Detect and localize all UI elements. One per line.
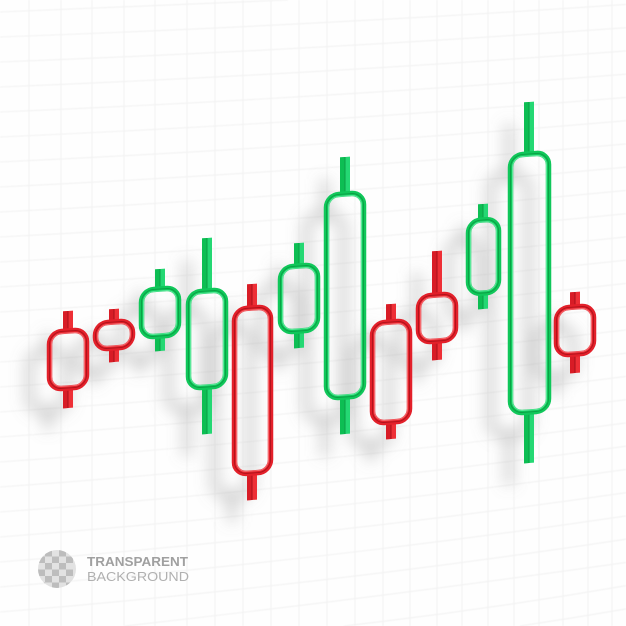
watermark text (87, 554, 189, 584)
candle 2: red (96, 308, 132, 363)
candle 7: green (326, 156, 364, 435)
candle 8: red (372, 303, 410, 440)
candle 5: red (234, 283, 270, 501)
candle shadows (30, 124, 574, 522)
candle 10: green (468, 203, 498, 310)
candle 1: red (50, 310, 86, 409)
candle 3: green (142, 268, 178, 352)
candle 4: green (188, 237, 226, 435)
icon: checkerboard disc (38, 550, 76, 588)
candle 6: green (280, 242, 318, 349)
candle 9: red (418, 250, 456, 361)
candle 12: red (556, 291, 594, 374)
watermark text: TRANSPARENT (87, 554, 188, 569)
candle 11: green (510, 101, 548, 464)
watermark text: BACKGROUND (87, 569, 189, 584)
